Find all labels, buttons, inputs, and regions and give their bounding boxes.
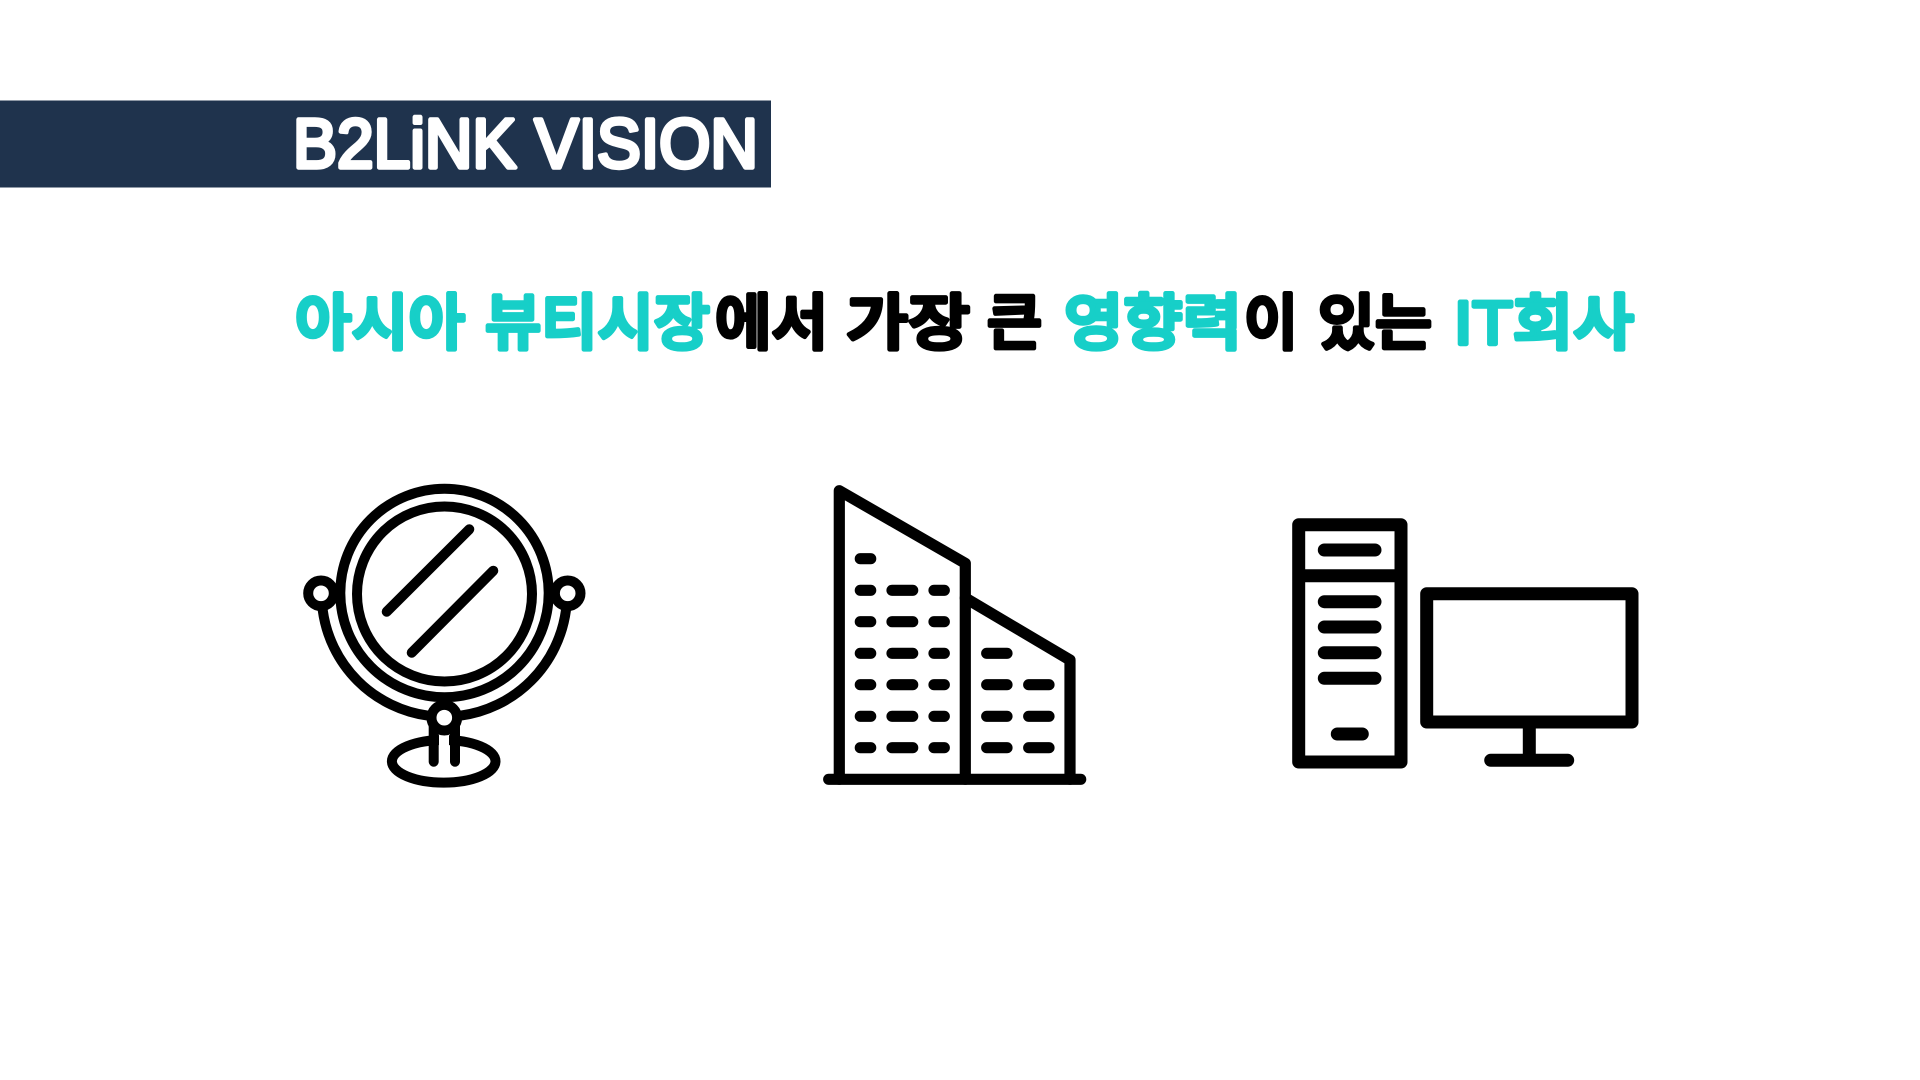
banner: B2LiNK VISION [0, 100, 771, 188]
headline: vision statement: 뷰티시장 [485, 289, 710, 357]
headline: vision statement: 에서 [715, 289, 828, 357]
icon: desktop computer [1299, 525, 1632, 762]
computer tower [1299, 525, 1401, 762]
banner title text: B2LiNK VISION [293, 104, 758, 182]
headline: vision statement: 영향력 [1064, 289, 1242, 357]
headline: vision statement: IT회사 [1454, 289, 1634, 357]
computer monitor [1427, 594, 1632, 760]
headline: vision statement: 큰 [987, 289, 1042, 357]
headline: vision statement: 이 [1244, 289, 1298, 357]
icon: office buildings [829, 491, 1081, 779]
headline: vision statement: 가장 [846, 289, 970, 357]
headline: vision statement: 아시아 [295, 289, 465, 357]
icon: beauty mirror [308, 489, 580, 783]
headline: vision statement: 있는 [1318, 289, 1432, 357]
headline: vision statement [295, 289, 1634, 357]
